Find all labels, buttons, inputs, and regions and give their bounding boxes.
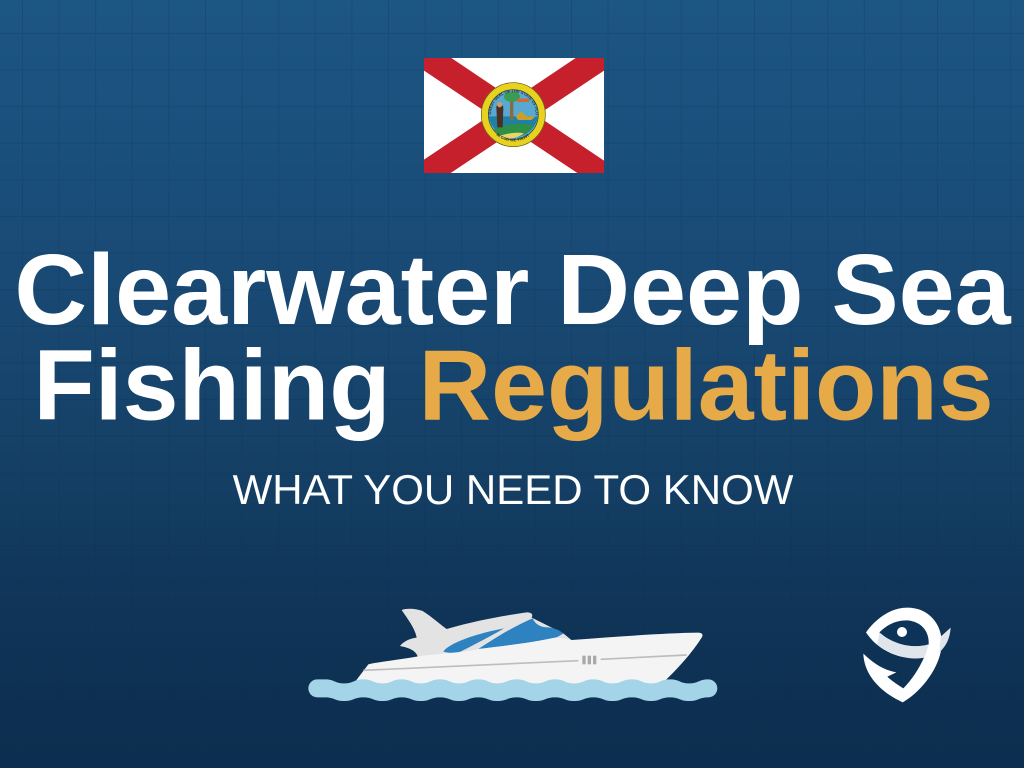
icon: Florida state flag <box>424 58 604 173</box>
icon: state seal: IN GOD WE TRUST <box>496 133 529 142</box>
yacht hull <box>353 633 703 685</box>
icon: state seal <box>481 82 546 147</box>
water wave <box>308 679 717 701</box>
yacht flybridge <box>400 609 573 658</box>
title: line one: Clearwater Deep Sea <box>14 234 1012 346</box>
subtitle: WHAT YOU NEED TO KNOW <box>233 466 794 513</box>
title: line two: Fishing Regulations <box>33 330 994 442</box>
hull vents <box>582 656 596 664</box>
icon: state seal: GREAT SEAL OF THE STATE OF FLORIDA <box>488 90 538 115</box>
hull stripe <box>363 655 687 670</box>
icon: motor yacht on water <box>308 609 717 701</box>
icon: fish hook logo <box>863 608 951 702</box>
yacht windows <box>443 618 563 653</box>
